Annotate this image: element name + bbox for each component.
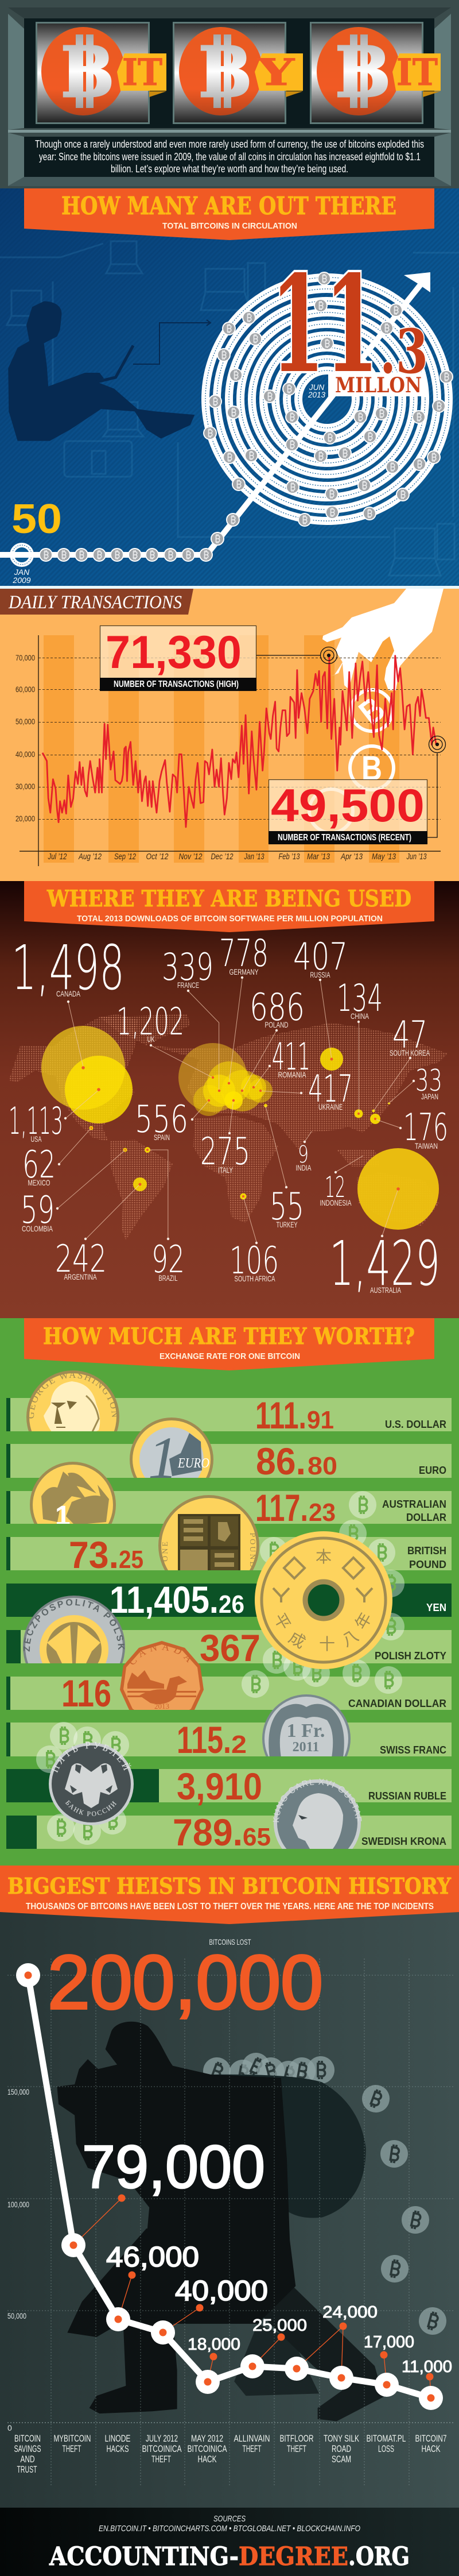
- translucent bitcoins: [36, 1491, 404, 1845]
- stat: indonesia: INDONESIA: [320, 1198, 352, 1207]
- x axis labels: Aug ’12: [78, 852, 102, 862]
- rate: euro: 80: [308, 1452, 337, 1480]
- y axis labels: 100,000: [7, 2200, 29, 2209]
- y axis labels: 50,000: [15, 717, 35, 726]
- rate: yen: YEN: [426, 1602, 446, 1613]
- rate: australian dollar: 23: [309, 1499, 336, 1527]
- panel: how much are they worth: [0, 1318, 459, 1866]
- location dots: [81, 1058, 400, 1198]
- reel 2: B + Y: B: [199, 31, 252, 113]
- stat: france: 339: [162, 946, 213, 989]
- rate: swedish krona: 65: [243, 1823, 271, 1851]
- incident labels: BITCOINICA: [142, 2443, 182, 2454]
- rate rows: [6, 1398, 452, 1849]
- x axis labels: Jan ’13: [244, 852, 264, 862]
- rate: british pound: BRITISH: [407, 1545, 446, 1557]
- hand illustration with coins: B: [352, 689, 392, 732]
- reel 3: B + IT: [311, 23, 441, 123]
- x axis labels: May ’13: [372, 852, 396, 862]
- coin: canadian dollar: [120, 1641, 204, 1710]
- stat: uk: UK: [147, 1034, 155, 1044]
- stat: australia: AUSTRALIA: [370, 1285, 401, 1295]
- stat: turkey: TURKEY: [277, 1220, 298, 1229]
- chart grid: [7, 1959, 453, 2485]
- rate: swedish krona: SWEDISH KRONA: [361, 1836, 446, 1847]
- coin: japanese yen: [255, 1531, 392, 1669]
- value 50: 50: [11, 496, 62, 542]
- stat: brazil: [151, 1238, 185, 1283]
- rate: canadian dollar: CANADIAN DOLLAR: [348, 1698, 446, 1709]
- stat: argentina: ARGENTINA: [64, 1272, 97, 1281]
- heading banner: HOW MUCH ARE THEY WORTH?: [43, 1323, 415, 1350]
- stat: germany: [219, 932, 269, 976]
- stat: india: 9: [298, 1141, 309, 1168]
- rate: british pound: POUND: [409, 1559, 446, 1570]
- coin: euro: [130, 1418, 213, 1478]
- rate: canadian dollar: 116: [61, 1672, 111, 1714]
- label endpoints: [56, 976, 415, 1244]
- brand logo: DEGREE: [239, 2542, 348, 2571]
- dotted world map: [9, 1014, 448, 1240]
- coin: australian dollar: [30, 1462, 116, 1524]
- coin: british pound: POUND: [248, 1532, 256, 1569]
- stat: south africa: SOUTH AFRICA: [234, 1274, 275, 1283]
- label jan 2009: 2009: [12, 576, 31, 585]
- rate: euro: 86.: [256, 1440, 306, 1482]
- panel: how many are out there: [0, 188, 459, 587]
- x axis labels: [48, 852, 427, 862]
- incident labels: MAY 2012: [191, 2433, 223, 2444]
- coin: euro: EURO: [177, 1456, 209, 1471]
- rate: russian ruble: [177, 1765, 446, 1808]
- rate: euro: [256, 1440, 446, 1482]
- x axis labels: Jun ’13: [406, 852, 427, 862]
- rate bars: [6, 1398, 452, 1849]
- stat: colombia: 59: [21, 1189, 55, 1232]
- stat: china: CHINA: [351, 1011, 369, 1021]
- rate: russian ruble: 3,910: [177, 1765, 262, 1808]
- coin: russian ruble: [49, 1741, 134, 1825]
- heading banner: WHERE THEY ARE BEING USED: [46, 886, 411, 912]
- stat: romania: ROMANIA: [278, 1070, 306, 1079]
- 11.3 million figure: 11: [271, 246, 379, 403]
- x axis labels: Jul ’12: [48, 852, 67, 862]
- stat: france: FRANCE: [177, 980, 199, 990]
- y axis labels: 30,000: [15, 782, 35, 791]
- recent marker: [427, 736, 445, 837]
- chart nodes: [16, 1963, 443, 2410]
- rate: polish zloty: [200, 1627, 446, 1669]
- label jun 2013: 2013: [308, 391, 326, 399]
- faint background devices: [0, 241, 459, 576]
- reel 1: B + IT: [37, 23, 166, 123]
- stat: ukraine: UKRAINE: [318, 1102, 343, 1111]
- stat: usa: USA: [31, 1134, 42, 1144]
- y axis labels: [15, 653, 35, 823]
- transactions line chart: [42, 656, 436, 827]
- intro text: [35, 138, 424, 175]
- y axis labels: [7, 2087, 29, 2432]
- panel: biggest heists: [0, 1866, 459, 2509]
- rate: russian ruble: RUSSIAN RUBLE: [368, 1790, 446, 1802]
- coin: canadian dollar: 2013: [154, 1702, 169, 1710]
- stat: canada: CANADA: [56, 989, 80, 998]
- rate: swiss franc: 2: [231, 1731, 247, 1759]
- coin: japanese yen: 八: [339, 1627, 361, 1650]
- incident labels: THEFT: [242, 2443, 262, 2454]
- coin: australian dollar: 1: [55, 1501, 71, 1531]
- stat: colombia: [21, 1189, 55, 1233]
- stat: turkey: 55: [270, 1185, 304, 1229]
- stat: south korea: SOUTH KOREA: [390, 1048, 430, 1057]
- stat: mexico: MEXICO: [28, 1178, 50, 1187]
- incident labels: HACKS: [107, 2443, 129, 2454]
- stat: japan: 33: [415, 1064, 442, 1098]
- value: 46,000: 46,000: [106, 2242, 199, 2273]
- rate: us dollar: [255, 1394, 446, 1436]
- stat: italy: 275: [200, 1130, 250, 1173]
- stat: usa: [9, 1100, 63, 1144]
- heading banner: [0, 1866, 459, 1924]
- coin: swiss franc: [262, 1694, 351, 1756]
- y axis labels: 50,000: [7, 2311, 26, 2320]
- rate: us dollar: U.S. DOLLAR: [385, 1419, 446, 1430]
- spiral of coins: [205, 277, 449, 521]
- x axis labels: Apr ’13: [340, 852, 363, 862]
- stat: italy: [200, 1130, 250, 1175]
- incident labels: HACK: [421, 2443, 441, 2454]
- coin: polish zloty: [23, 1596, 125, 1663]
- rate: euro: EURO: [419, 1465, 446, 1476]
- coin: british pound: [158, 1495, 259, 1570]
- value: 24,000: 24,000: [322, 2303, 378, 2322]
- value: 18,000: 18,000: [188, 2335, 240, 2354]
- coin: japanese yen: 年: [352, 1609, 375, 1632]
- stat: japan: [415, 1064, 442, 1101]
- stat: indonesia: 12: [325, 1171, 345, 1204]
- slot machine frame: [8, 7, 451, 186]
- coin: swedish krona: KUNG CARL XVI GUSTAF: [273, 1778, 361, 1822]
- reel 1: B + IT: B: [61, 31, 114, 113]
- heading banner: TOTAL BITCOINS IN CIRCULATION: [162, 221, 297, 231]
- stat: usa: 1,113: [9, 1100, 63, 1143]
- incident labels: TRUST: [17, 2464, 37, 2475]
- section title: DAILY TRANSACTIONS: [8, 592, 182, 613]
- proportional bubbles: [41, 1026, 439, 1230]
- stat: spain: SPAIN: [154, 1133, 170, 1142]
- incident labels: LINODE: [104, 2433, 131, 2444]
- incident labels: BITOMAT.PL: [366, 2433, 406, 2444]
- coin: russian ruble: БАНК РОССИИ: [65, 1800, 117, 1816]
- panel: where they are being used: [0, 881, 459, 1318]
- hand illustration with coins: B: [361, 749, 382, 787]
- arrow from laptop to spiral: [133, 320, 211, 364]
- y axis and gridlines: [20, 635, 441, 866]
- x axis labels: Mar ’13: [307, 852, 330, 862]
- footer: [0, 2508, 459, 2576]
- x axis labels: Dec ’12: [211, 852, 234, 862]
- rate: british pound: 73.: [69, 1534, 119, 1576]
- x axis labels: Oct ’12: [146, 852, 169, 862]
- label jan 2009: JAN: [14, 567, 30, 577]
- x axis labels: Nov ’12: [179, 852, 203, 862]
- x axis labels: Sep ’12: [114, 852, 136, 862]
- incident labels: SAVINGS: [14, 2443, 41, 2454]
- person with laptop silhouette: [8, 302, 195, 441]
- value: 40,000: 40,000: [175, 2276, 268, 2307]
- incident labels: HACK: [197, 2454, 217, 2465]
- thief silhouette, legs: [67, 2229, 383, 2421]
- heading banner: TOTAL 2013 DOWNLOADS OF BITCOIN SOFTWARE PER MILLION POPULATION: [77, 914, 383, 924]
- coins over the figure: [314, 272, 334, 350]
- sources: EN.BITCOIN.IT • BITCOINCHARTS.COM • BTCGLOBAL.NET • BLOCKCHAIN.INFO: [99, 2524, 360, 2533]
- rate: swiss franc: [177, 1718, 446, 1761]
- bitcoins on the line and spiral: [39, 303, 453, 562]
- orange callout leaders: [73, 2198, 431, 2398]
- coin: euro: 1: [148, 1425, 178, 1491]
- panel: daily transactions: [0, 586, 459, 882]
- loss line: [28, 1975, 431, 2398]
- rate: yen: [110, 1578, 446, 1621]
- stat: argentina: 242: [55, 1238, 107, 1281]
- leader lines: [58, 978, 414, 1243]
- value: 11,000: 11,000: [402, 2358, 452, 2376]
- incident labels: THEFT: [151, 2454, 171, 2465]
- stat: russia: 407: [293, 936, 348, 979]
- stat: italy: ITALY: [218, 1165, 233, 1175]
- value: 79,000: 79,000: [82, 2133, 265, 2201]
- brand logo: ACCOUNTING-: [49, 2542, 239, 2571]
- coin: swiss franc: 2011: [293, 1740, 319, 1755]
- 11.3 million figure: .3: [380, 315, 428, 387]
- stat: germany: GERMANY: [230, 967, 259, 976]
- incident labels: THEFT: [62, 2443, 81, 2454]
- start ring jan 2009: [11, 545, 32, 565]
- rate: us dollar: 91: [307, 1406, 334, 1434]
- stat: ukraine: [308, 1068, 353, 1111]
- stat: canada: [11, 933, 125, 1004]
- stat: taiwan: TAIWAN: [415, 1141, 438, 1150]
- value: 17,000: 17,000: [364, 2333, 414, 2351]
- bitcoins spilling from sack: [199, 2048, 449, 2338]
- stat: uk: [116, 1001, 184, 1044]
- value: 200,000: 200,000: [48, 1940, 323, 2025]
- stat: indonesia: [320, 1171, 352, 1207]
- coin: russian ruble: ПЯТЬ РУБЛЕЙ: [52, 1741, 131, 1773]
- section background: header: [0, 0, 459, 188]
- sources: [99, 2515, 360, 2533]
- rate: british pound: [69, 1534, 446, 1576]
- stat: south africa: [230, 1239, 279, 1283]
- heading banner: EXCHANGE RATE FOR ONE BITCOIN: [160, 1351, 300, 1361]
- rate: australian dollar: AUSTRALIAN: [382, 1499, 446, 1510]
- reel 2: B + Y: Y: [257, 51, 295, 94]
- rate: swiss franc: SWISS FRANC: [380, 1744, 446, 1756]
- rate: swedish krona: [173, 1811, 446, 1853]
- incident labels: AND: [21, 2454, 34, 2465]
- stat: india: INDIA: [296, 1163, 312, 1172]
- incident labels: TONY SILK: [324, 2433, 359, 2444]
- rate: australian dollar: 117.: [255, 1486, 308, 1529]
- stat: brazil: 92: [151, 1238, 185, 1281]
- y axis labels: 150,000: [7, 2087, 29, 2096]
- stat: uk: 1,202: [116, 1001, 184, 1044]
- coin: japanese yen: 十: [319, 1635, 335, 1653]
- growth line with arrow: [0, 272, 430, 555]
- y axis labels: 0: [7, 2423, 12, 2432]
- stat: china: [337, 977, 383, 1021]
- stat: colombia: COLOMBIA: [22, 1224, 53, 1233]
- heading banner: [24, 881, 434, 932]
- brand logo: .ORG: [348, 2542, 410, 2571]
- incident labels: JULY 2012: [146, 2433, 178, 2444]
- rate: yen: 11,405.: [110, 1578, 219, 1621]
- incident labels: ROAD: [332, 2443, 351, 2454]
- y axis labels: 40,000: [15, 750, 35, 759]
- brand logo: [49, 2542, 410, 2571]
- rate: canadian dollar: [61, 1672, 446, 1714]
- stat: russia: RUSSIA: [310, 970, 330, 979]
- label jun 2013: [308, 383, 326, 399]
- thief silhouette, upper body and sack: [57, 2022, 366, 2240]
- rate: yen: 26: [219, 1590, 244, 1619]
- coin: swiss franc: 1 Fr.: [287, 1720, 325, 1741]
- rate: australian dollar: DOLLAR: [406, 1512, 446, 1523]
- rate: swiss franc: 115.: [177, 1718, 231, 1761]
- axis title: BITCOINS LOST: [209, 1937, 251, 1947]
- stat: mexico: 62: [22, 1144, 56, 1187]
- stat: romania: 411: [272, 1036, 310, 1079]
- heading banner: HOW MANY ARE OUT THERE: [61, 192, 396, 220]
- stat: canada: 1,498: [11, 933, 125, 1004]
- incident labels: MYBITCOIN: [54, 2433, 91, 2444]
- rate: polish zloty: POLISH ZLOTY: [375, 1650, 446, 1662]
- stat: south korea: 47: [392, 1014, 427, 1057]
- coin: japanese yen: 平: [270, 1610, 294, 1633]
- hand illustration with coins: [309, 589, 444, 833]
- reel 2: B + Y: [173, 23, 303, 123]
- reel 3: B + IT: B: [335, 31, 391, 113]
- stat: brazil: BRAZIL: [158, 1273, 178, 1283]
- rate: us dollar: 111.: [255, 1394, 306, 1436]
- incident labels: THEFT: [287, 2443, 306, 2454]
- stat: mexico: [22, 1144, 56, 1187]
- incident labels: LOSS: [378, 2443, 394, 2454]
- stat: south africa: 106: [230, 1239, 279, 1283]
- heading banner: [24, 188, 434, 240]
- stat: germany: 778: [219, 932, 269, 975]
- heading banner: [24, 1318, 434, 1370]
- incident labels: BITCOIN: [14, 2433, 41, 2444]
- stat: romania: [272, 1036, 310, 1079]
- coin: british pound: ONE: [161, 1540, 170, 1562]
- sources: SOURCES: [213, 2515, 246, 2524]
- x axis labels: Feb ’13: [279, 852, 300, 862]
- value: 25,000: 25,000: [252, 2316, 307, 2335]
- coin: japanese yen: 本: [316, 1548, 332, 1566]
- month bands: [44, 635, 399, 863]
- stat: china: 134: [337, 977, 383, 1020]
- rate: australian dollar: [255, 1486, 446, 1529]
- coin: swedish krona: [273, 1778, 361, 1849]
- coin: canadian dollar: CANADA: [130, 1645, 189, 1664]
- incident labels: ALLINVAIN: [234, 2433, 270, 2444]
- y axis labels: 60,000: [15, 685, 35, 694]
- callout: recent: NUMBER OF TRANSACTIONS (RECENT): [278, 833, 411, 843]
- label jan 2009: [12, 567, 31, 585]
- reel 3: B + IT: IT: [396, 51, 438, 94]
- stat: japan: JAPAN: [421, 1092, 438, 1101]
- coin: japanese yen: 成: [286, 1628, 309, 1652]
- incident labels: BITFLOOR: [280, 2433, 313, 2444]
- stat: ukraine: 417: [308, 1068, 353, 1111]
- incident labels: BITCOINICA: [187, 2443, 227, 2454]
- reel 1: B + IT: IT: [122, 51, 162, 94]
- incident labels: [14, 2433, 446, 2475]
- rate: polish zloty: 367: [200, 1627, 260, 1669]
- stat: poland: 686: [250, 986, 305, 1029]
- incident labels: BITCOIN7: [415, 2433, 446, 2444]
- 11.3 million figure: MILLON: [335, 373, 422, 397]
- callout: recent: 49,500: [271, 780, 425, 832]
- incident labels: SCAM: [332, 2454, 351, 2465]
- label jun 2013: JUN: [309, 383, 324, 392]
- callout: high: NUMBER OF TRANSACTIONS (HIGH): [114, 679, 239, 689]
- y axis labels: 20,000: [15, 814, 35, 823]
- coin: george washington: GEORGE WASHINGTON: [29, 1373, 116, 1419]
- intro text: billion. Let’s explore what they’re worth and how they’re being used.: [111, 163, 348, 175]
- stat: poland: POLAND: [265, 1020, 288, 1029]
- callout: high: 71,330: [106, 627, 242, 678]
- y axis labels: 70,000: [15, 653, 35, 662]
- rate: swedish krona: 789.: [173, 1811, 243, 1853]
- rate: british pound: 25: [119, 1546, 143, 1574]
- high marker: [256, 647, 337, 664]
- stat: spain: 556: [135, 1098, 188, 1141]
- node centres: [24, 1971, 435, 2402]
